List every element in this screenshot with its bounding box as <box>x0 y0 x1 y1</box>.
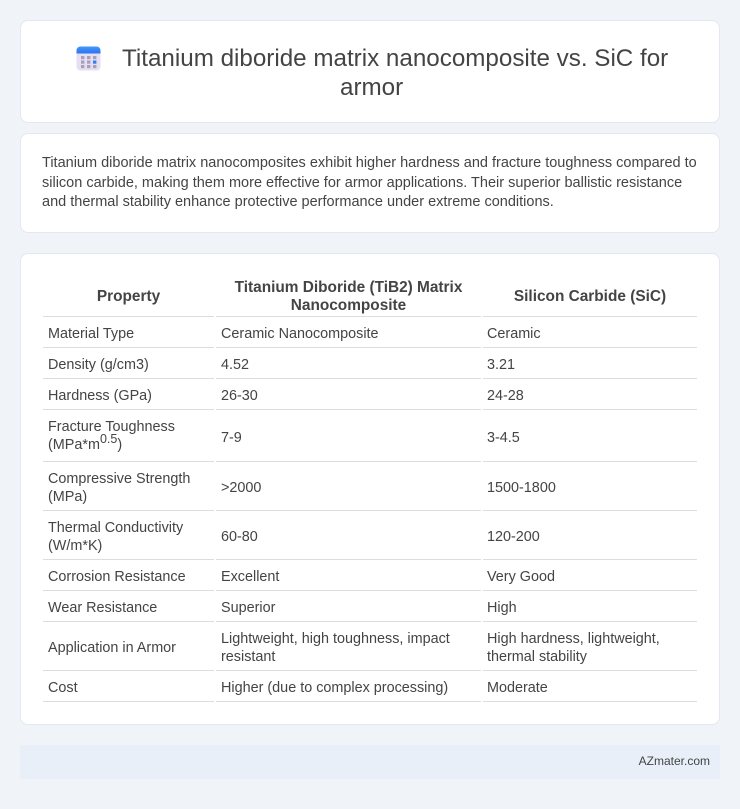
row: density <box>43 357 697 379</box>
row: hardness: 24-28 <box>487 388 524 404</box>
comparison table <box>43 279 697 702</box>
icon: calendar <box>76 46 100 70</box>
row: hardness <box>43 388 697 410</box>
row: compressive strength: >2000 <box>221 480 261 496</box>
row: density: 4.52 <box>221 357 249 373</box>
row: fracture toughness: 3-4.5 <box>487 430 520 446</box>
row: application in armor: resistant <box>221 649 275 665</box>
row: hardness: 26-30 <box>221 388 258 404</box>
table header <box>43 279 697 702</box>
table header: Property <box>97 288 160 305</box>
summary text <box>42 155 697 210</box>
row: corrosion resistance: Very Good <box>487 569 555 585</box>
row: thermal conductivity: 120-200 <box>487 529 540 545</box>
row: corrosion resistance <box>43 569 697 591</box>
row: wear resistance: Wear Resistance <box>48 600 157 616</box>
title: Titanium diboride matrix nanocomposite vs. SiC for <box>122 45 668 72</box>
table header: Silicon Carbide (SiC) <box>514 288 666 305</box>
row: wear resistance: Superior <box>221 600 275 616</box>
row: fracture toughness: (MPa*m0.5) <box>48 432 122 453</box>
row: application in armor: thermal stability <box>487 649 587 665</box>
row: thermal conductivity: 60-80 <box>221 529 258 545</box>
table header: Nanocomposite <box>291 297 406 314</box>
row: compressive strength <box>43 471 697 511</box>
row: thermal conductivity: (W/m*K) <box>48 538 102 554</box>
title <box>122 45 668 101</box>
row: fracture toughness <box>43 419 697 462</box>
footer bar <box>20 745 720 779</box>
row: application in armor: High hardness, lightweight, <box>487 631 660 647</box>
row: compressive strength: (MPa) <box>48 489 87 505</box>
summary panel <box>20 133 720 233</box>
header panel <box>20 20 720 123</box>
row: application in armor: Lightweight, high toughness, impact <box>221 631 450 647</box>
row: cost: Moderate <box>487 680 548 696</box>
row: wear resistance <box>43 600 697 622</box>
row: material type: Ceramic <box>487 326 541 342</box>
summary text: Titanium diboride matrix nanocomposites exhibit higher hardness and fracture toughness compared to <box>42 155 697 171</box>
footer source text: AZmater.com <box>639 754 710 768</box>
row: cost: Cost <box>48 680 78 696</box>
row: application in armor: Application in Armor <box>48 640 176 656</box>
row: material type: Ceramic Nanocomposite <box>221 326 379 342</box>
row: thermal conductivity <box>43 520 697 560</box>
row: application in armor <box>43 631 697 671</box>
row: compressive strength: Compressive Strength <box>48 471 190 487</box>
row: density: 3.21 <box>487 357 515 373</box>
row: hardness: Hardness (GPa) <box>48 388 152 404</box>
row: compressive strength: 1500-1800 <box>487 480 556 496</box>
row: fracture toughness: Fracture Toughness <box>48 419 175 435</box>
title: armor <box>340 74 403 101</box>
row: corrosion resistance: Corrosion Resistance <box>48 569 186 585</box>
row: material type <box>43 326 697 348</box>
comparison table panel <box>20 253 720 725</box>
row: cost: Higher (due to complex processing) <box>221 680 448 696</box>
table header: Titanium Diboride (TiB2) Matrix <box>235 279 462 296</box>
summary text: and thermal stability enhance protective performance under extreme conditions. <box>42 194 554 210</box>
summary text: silicon carbide, making them more effective for armor applications. Their superior ballistic resistance <box>42 174 682 190</box>
row: cost <box>43 680 697 702</box>
row: fracture toughness: 7-9 <box>221 430 242 446</box>
row: thermal conductivity: Thermal Conductivity <box>48 520 183 536</box>
row: density: Density (g/cm3) <box>48 357 149 373</box>
row: wear resistance: High <box>487 600 517 616</box>
row: corrosion resistance: Excellent <box>221 569 279 585</box>
row: material type: Material Type <box>48 326 134 342</box>
